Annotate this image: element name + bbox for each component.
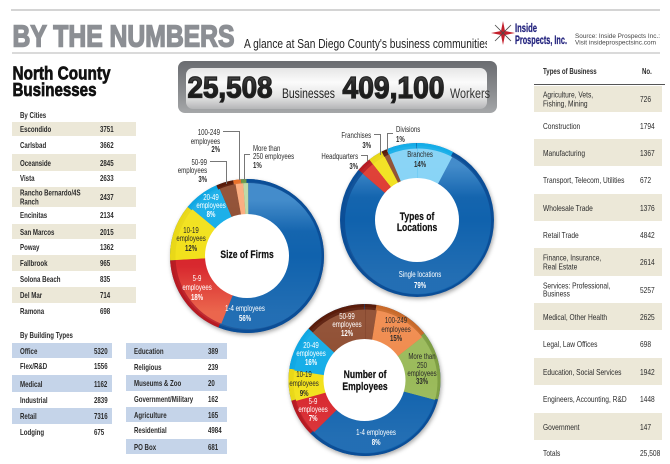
table: building types right: 681 bbox=[208, 441, 218, 451]
label: 20-49 employees bbox=[196, 193, 226, 219]
table: building types right: Government/Military bbox=[134, 394, 193, 404]
label: more than 250 employees: employees bbox=[407, 369, 437, 378]
table: types of business: 672 bbox=[640, 175, 651, 185]
source note bbox=[575, 33, 660, 46]
table: types of business: Education, Social Services bbox=[543, 366, 621, 376]
label: 5-9 employees: 5-9 bbox=[309, 397, 317, 406]
label: more than 250 employees: 33% bbox=[416, 377, 429, 386]
icon: logo star bbox=[487, 18, 519, 48]
table: building types right: Religious bbox=[134, 362, 162, 372]
label: 50-99 employees: 50-99 bbox=[339, 312, 355, 321]
table: types of business: Medical, Other Health bbox=[543, 311, 607, 321]
table: types of business: 147 bbox=[640, 421, 651, 431]
label: 100-249 employees: 2% bbox=[211, 145, 221, 154]
table header: types of business: No. bbox=[642, 66, 652, 76]
table: building types left: Retail bbox=[20, 411, 37, 421]
stat: businesses: Businesses bbox=[282, 86, 335, 101]
label: 5-9 employees bbox=[182, 274, 212, 302]
label: 20-49 employees: 8% bbox=[207, 210, 216, 219]
table: types of business: Transport, Telecom, Utilities bbox=[543, 175, 624, 185]
label: headquarters bbox=[321, 152, 368, 171]
label: franchises: 3% bbox=[362, 141, 372, 150]
table: building types right: 162 bbox=[208, 394, 218, 404]
donut title: Employees bbox=[342, 381, 388, 393]
label: 10-19 employees: employees bbox=[176, 234, 206, 243]
table: building types left: 5320 bbox=[94, 345, 108, 355]
table: building types left: Lodging bbox=[20, 427, 44, 437]
table: building types left: 2839 bbox=[94, 395, 108, 405]
label: 100-249 employees: employees bbox=[381, 325, 411, 334]
label: 10-19 employees: 10-19 bbox=[183, 226, 199, 235]
label: single locations: 79% bbox=[414, 281, 427, 290]
table: by cities: 2633 bbox=[100, 173, 114, 183]
label: 1-4 employees bbox=[356, 428, 396, 447]
label: more than 250 employees: 1% bbox=[253, 161, 262, 170]
chart: types of locations donut bbox=[321, 125, 494, 297]
label: 1-4 employees: 56% bbox=[239, 314, 252, 323]
label: 20-49 employees: 16% bbox=[305, 358, 318, 367]
table: types of business: Legal, Law Offices bbox=[543, 339, 597, 349]
label: headquarters: 3% bbox=[349, 162, 359, 171]
table header: types of business bbox=[534, 62, 665, 85]
table: types of business: Fishing, Mining bbox=[543, 98, 588, 108]
label: 100-249 employees: 15% bbox=[390, 334, 403, 343]
label: more than 250 employees bbox=[407, 352, 437, 386]
table: building types right: 239 bbox=[208, 362, 218, 372]
donut title: Types of bbox=[400, 211, 435, 223]
table: building types right bbox=[126, 343, 227, 454]
table: types of business: 4842 bbox=[640, 229, 655, 239]
table: building types right: Residential bbox=[134, 425, 167, 435]
table: by cities: 714 bbox=[100, 290, 110, 300]
table: building types right: PO Box bbox=[134, 441, 156, 451]
stat: businesses: 25,508 bbox=[188, 72, 272, 104]
source note: Visit insideprospectsinc.com bbox=[575, 40, 656, 46]
label: 50-99 employees: 50-99 bbox=[191, 158, 207, 167]
table: by cities: 835 bbox=[100, 274, 110, 284]
table: types of business: Engineers, Accounting, R&D bbox=[543, 394, 627, 404]
table: building types left: 1162 bbox=[94, 378, 107, 388]
table: types of business: 25,508 bbox=[640, 448, 660, 458]
table: building types left: 1556 bbox=[94, 361, 108, 371]
label: divisions bbox=[388, 125, 421, 152]
table: building types left: Medical bbox=[20, 378, 42, 388]
label: 100-249 employees bbox=[381, 316, 411, 343]
table: types of business: Totals bbox=[543, 448, 560, 458]
label: 20-49 employees: 20-49 bbox=[203, 193, 219, 202]
table: building types left: Flex/R&D bbox=[20, 361, 47, 371]
table: types of business: Business bbox=[543, 288, 570, 298]
stat banner bbox=[178, 61, 497, 113]
table: types of business: Real Estate bbox=[543, 261, 577, 271]
table: by cities bbox=[12, 122, 136, 316]
table: by cities: 3751 bbox=[100, 124, 114, 134]
label: 20-49 employees: 20-49 bbox=[303, 341, 319, 350]
table: by cities: 2845 bbox=[100, 157, 114, 167]
table: types of business: 2625 bbox=[640, 311, 655, 321]
donut title bbox=[342, 369, 388, 393]
label: more than 250 employees: More than bbox=[253, 144, 280, 153]
label: 5-9 employees: employees bbox=[182, 283, 212, 292]
table: building types right: 165 bbox=[208, 409, 218, 419]
table: building types left: Office bbox=[20, 345, 37, 355]
label: more than 250 employees bbox=[244, 144, 295, 180]
logo text: Inside bbox=[515, 21, 537, 35]
label: 50-99 employees: 3% bbox=[198, 175, 208, 184]
table: types of business bbox=[534, 86, 662, 458]
stat: workers: 409,100 bbox=[342, 70, 444, 105]
label: divisions: 1% bbox=[396, 135, 405, 144]
heading: North County Businesses: North County bbox=[12, 62, 111, 84]
table: types of business: 726 bbox=[640, 94, 651, 104]
table: building types right: Museums & Zoo bbox=[134, 378, 181, 388]
label: branches: Branches bbox=[407, 150, 433, 159]
label: branches: 14% bbox=[414, 160, 427, 169]
table: by cities: Fallbrook bbox=[20, 258, 48, 268]
table: types of business: Services: Professional, bbox=[543, 280, 610, 290]
table: by cities: Ramona bbox=[20, 306, 44, 316]
table: types of business: Government bbox=[543, 421, 579, 431]
table: building types right: Agriculture bbox=[134, 409, 167, 419]
label: 1-4 employees: 1-4 employees bbox=[225, 304, 265, 313]
table: building types right: 389 bbox=[208, 346, 218, 356]
table: by cities: Solona Beach bbox=[20, 274, 60, 284]
label: 20-49 employees: employees bbox=[296, 349, 326, 358]
label: 5-9 employees bbox=[298, 397, 328, 423]
label: 5-9 employees: 7% bbox=[309, 414, 318, 423]
donut title: Size of Firms bbox=[220, 249, 274, 261]
table: by cities: 698 bbox=[100, 306, 110, 316]
table: types of business: Retail Trade bbox=[543, 229, 579, 239]
label: 1-4 employees: 8% bbox=[372, 438, 381, 447]
label: 50-99 employees bbox=[332, 312, 362, 338]
label: more than 250 employees: More than bbox=[408, 352, 436, 361]
heading: by building types: By Building Types bbox=[20, 330, 73, 340]
label: branches bbox=[407, 150, 433, 169]
table: building types left: 7316 bbox=[94, 411, 108, 421]
table: types of business: Agriculture, Vets, bbox=[543, 90, 593, 100]
label: more than 250 employees: 250 employees bbox=[253, 152, 295, 161]
logo text: Prospects, Inc. bbox=[515, 33, 567, 47]
table: by cities: San Marcos bbox=[20, 226, 54, 236]
table: building types left: 675 bbox=[94, 427, 104, 437]
donut title: Number of bbox=[344, 369, 387, 381]
table: types of business: 1942 bbox=[640, 366, 655, 376]
table: by cities: Del Mar bbox=[20, 290, 42, 300]
table: building types left: Industrial bbox=[20, 395, 48, 405]
table: by cities: 2134 bbox=[100, 210, 114, 220]
logo text bbox=[515, 21, 567, 47]
label: 5-9 employees: employees bbox=[298, 405, 328, 414]
subtitle: A glance at San Diego County's business communities bbox=[244, 37, 490, 51]
label: more than 250 employees: 250 bbox=[417, 361, 427, 370]
label: 20-49 employees bbox=[296, 341, 326, 367]
table: types of business: Manufacturing bbox=[543, 147, 585, 157]
table: by cities: 965 bbox=[100, 258, 110, 268]
table: by cities: Carlsbad bbox=[20, 140, 46, 150]
label: 10-19 employees: 9% bbox=[300, 389, 309, 398]
table header: types of business: Types of Business bbox=[543, 66, 597, 76]
label: 50-99 employees: 12% bbox=[341, 329, 354, 338]
table: building types right: Education bbox=[134, 346, 164, 356]
table: types of business: 1367 bbox=[640, 147, 655, 157]
label: 1-4 employees bbox=[225, 304, 265, 323]
table: by cities: Escondido bbox=[20, 124, 51, 134]
table: types of business: 1448 bbox=[640, 394, 655, 404]
label: franchises: Franchises bbox=[341, 131, 371, 140]
table: types of business: Finance, Insurance, bbox=[543, 252, 601, 262]
label: 50-99 employees bbox=[178, 158, 226, 184]
label: 1-4 employees: 1-4 employees bbox=[356, 428, 396, 437]
stat: workers: Workers bbox=[450, 86, 490, 101]
table: by cities: 1362 bbox=[100, 242, 114, 252]
table: building types right: 20 bbox=[208, 378, 215, 388]
table: by cities: Vista bbox=[20, 173, 35, 183]
label: 5-9 employees: 5-9 bbox=[193, 274, 201, 283]
table: by cities: Rancho Bernardo/4S bbox=[20, 188, 81, 198]
source note: Source: Inside Prospects Inc.: bbox=[575, 33, 660, 40]
donut title bbox=[397, 211, 438, 234]
label: 10-19 employees bbox=[289, 370, 319, 398]
label: single locations bbox=[399, 270, 442, 290]
table: types of business: 698 bbox=[640, 339, 651, 349]
label: 100-249 employees: 100-249 bbox=[198, 128, 220, 137]
table: types of business: Wholesale Trade bbox=[543, 202, 593, 212]
label: 10-19 employees: 10-19 bbox=[296, 370, 312, 379]
table: by cities: 3662 bbox=[100, 140, 114, 150]
table: by cities: 2437 bbox=[100, 192, 114, 202]
donut title: Locations bbox=[397, 222, 438, 234]
table: types of business: 1376 bbox=[640, 202, 655, 212]
table: types of business: 1794 bbox=[640, 120, 655, 130]
table: building types left bbox=[12, 343, 112, 437]
stat: businesses bbox=[188, 72, 335, 104]
table: types of business: 5257 bbox=[640, 284, 655, 294]
table: by cities: Poway bbox=[20, 242, 39, 252]
label: divisions: Divisions bbox=[396, 125, 421, 134]
label: 10-19 employees: 12% bbox=[185, 244, 198, 253]
table: types of business: Construction bbox=[543, 120, 580, 130]
table: types of business: 2614 bbox=[640, 257, 655, 267]
label: 100-249 employees: employees bbox=[191, 137, 221, 146]
table: building types right: 4984 bbox=[208, 425, 222, 435]
heading: North County Businesses: Businesses bbox=[12, 79, 96, 100]
label: 10-19 employees bbox=[176, 226, 206, 253]
label: 50-99 employees: employees bbox=[178, 166, 208, 175]
label: franchises bbox=[341, 131, 380, 155]
chart: number of employees donut bbox=[288, 304, 440, 456]
heading: North County Businesses bbox=[12, 62, 111, 100]
title: BY THE NUMBERS bbox=[12, 18, 235, 54]
label: 5-9 employees: 18% bbox=[191, 293, 204, 302]
label: 10-19 employees: employees bbox=[289, 379, 319, 388]
table: by cities: Ranch bbox=[20, 196, 39, 206]
table: by cities: 2015 bbox=[100, 226, 114, 236]
label: headquarters: Headquarters bbox=[321, 152, 359, 161]
heading: by cities: By Cities bbox=[20, 110, 46, 120]
label: 20-49 employees: employees bbox=[196, 201, 226, 210]
label: single locations: Single locations bbox=[399, 270, 442, 279]
table: by cities: Oceanside bbox=[20, 157, 51, 167]
table: by cities: Encinitas bbox=[20, 210, 47, 220]
label: 100-249 employees: 100-249 bbox=[385, 316, 407, 325]
chart: size of firms donut bbox=[170, 128, 324, 333]
label: 50-99 employees: employees bbox=[332, 320, 362, 329]
label: 100-249 employees bbox=[191, 128, 240, 180]
